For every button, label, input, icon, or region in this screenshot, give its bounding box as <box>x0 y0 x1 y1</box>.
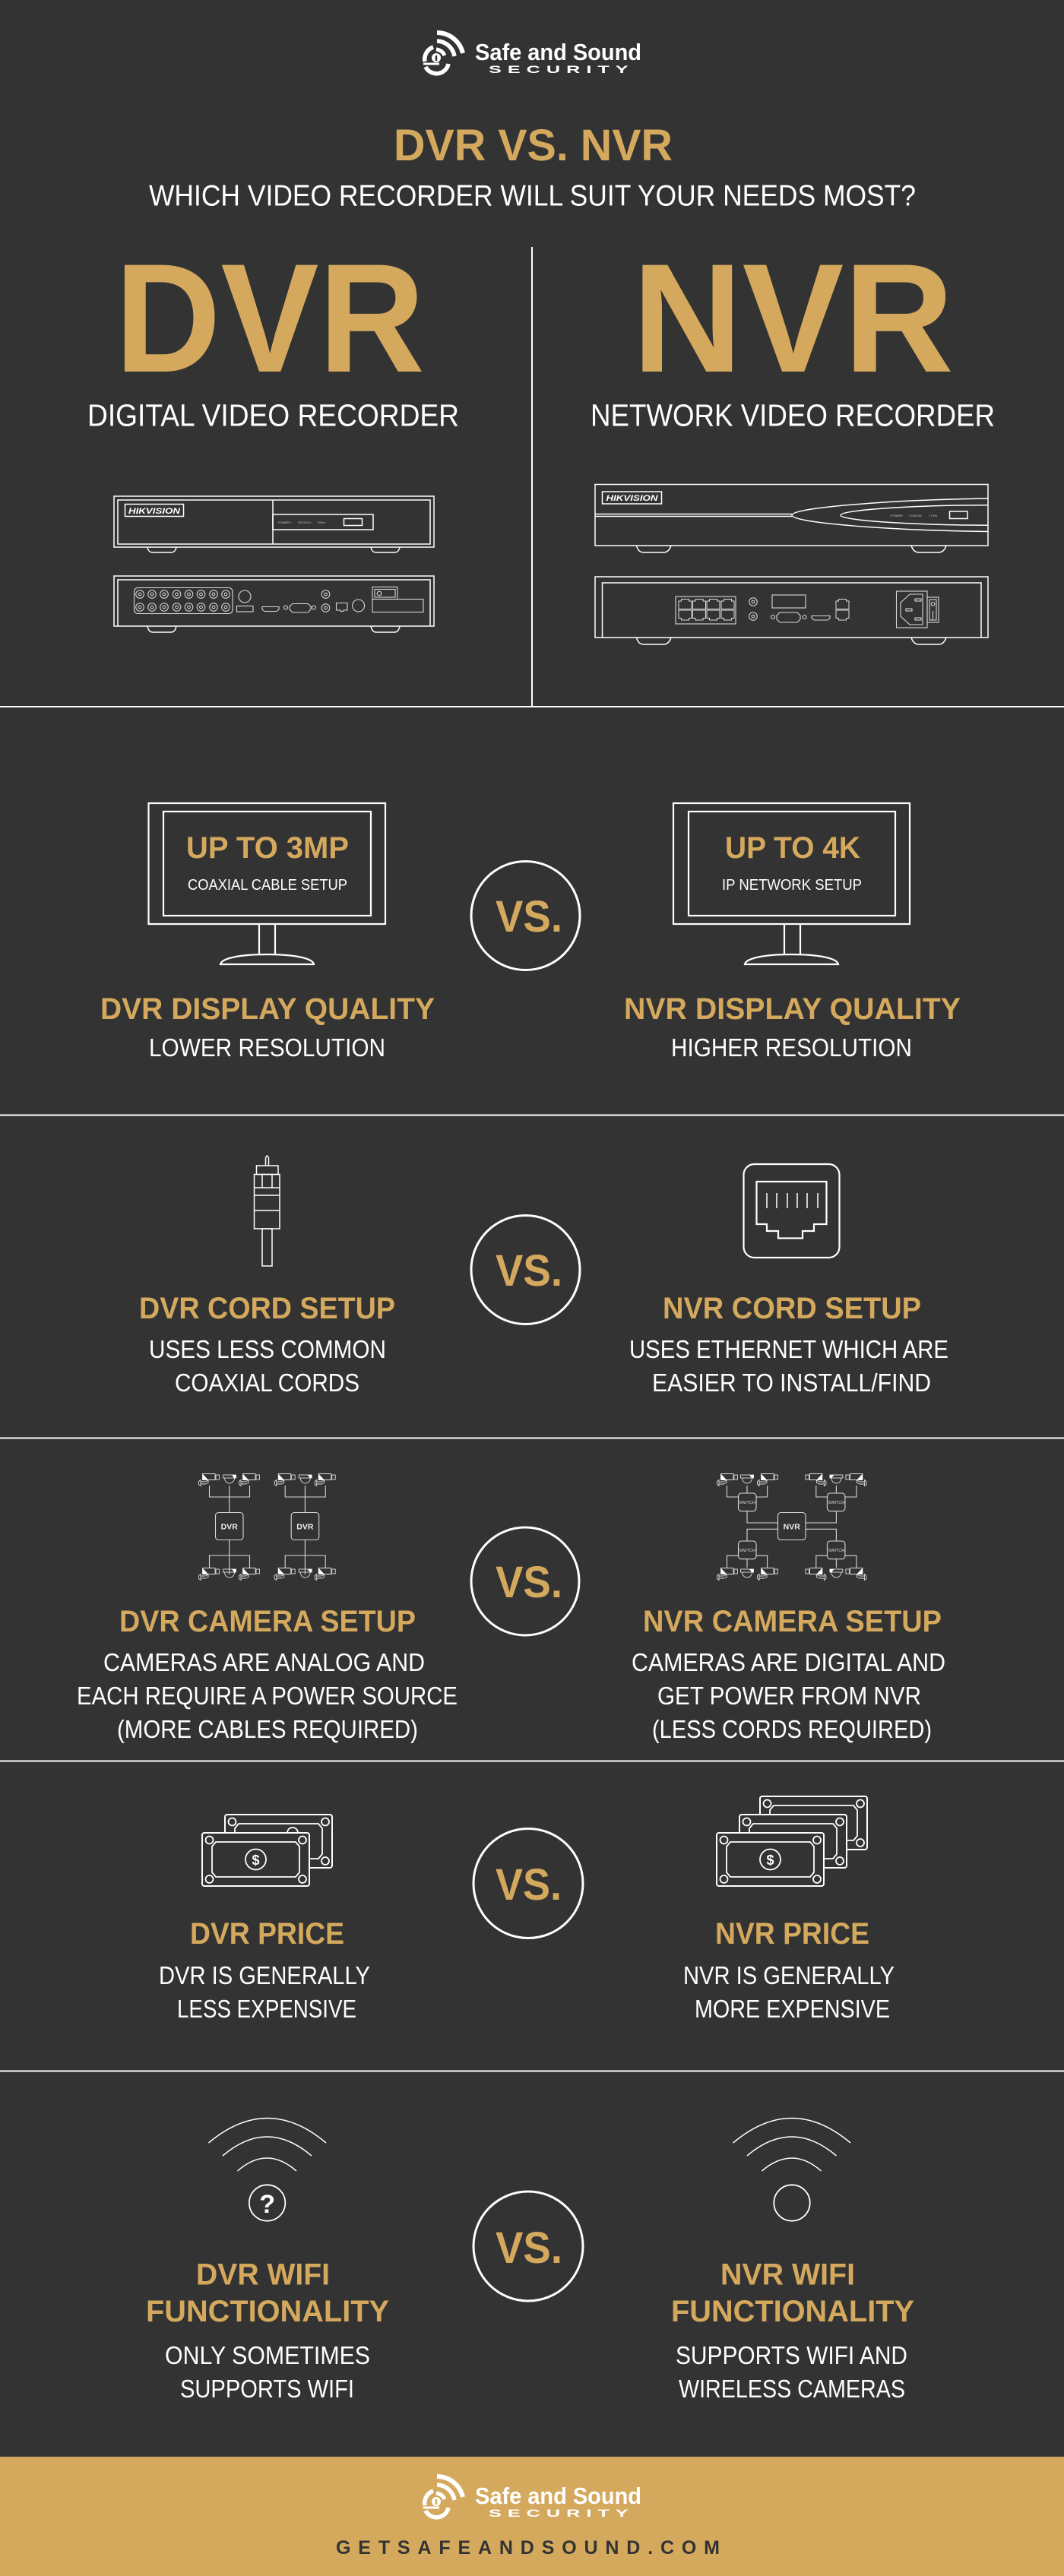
badge: VS 5 <box>473 2191 583 2301</box>
logo: Safe and Sound Security: Safe and Sound <box>475 39 641 65</box>
icon: NVR banknotes <box>717 1796 867 1886</box>
badge: VS 4: VS. <box>496 1860 562 1910</box>
NVR price text <box>683 1961 895 2023</box>
footer logo: SECURITY <box>489 2508 629 2519</box>
diagram: NVR camera wiring: SWITCH <box>739 1549 755 1553</box>
logo: Safe and Sound Security: SECURITY <box>489 64 629 75</box>
NVR cord heading: NVR CORD SETUP <box>663 1292 921 1325</box>
diagram: DVR camera wiring: DVR <box>296 1523 314 1532</box>
NVR wifi heading: NVR WIFI <box>720 2258 855 2292</box>
icon: wifi with question mark: ? <box>259 2190 275 2219</box>
icon: ethernet port <box>743 1164 839 1258</box>
heading: DVR: DVR <box>115 232 425 405</box>
diagram: DVR camera wiring: DVR <box>221 1523 238 1532</box>
icon: NVR front panel: ▪ STATUS <box>909 514 922 517</box>
diagram: NVR camera wiring: NVR <box>784 1523 800 1532</box>
NVR wifi heading: FUNCTIONALITY <box>671 2295 914 2328</box>
icon: DVR front panel: TV/N ▪ <box>317 521 326 524</box>
icon: NVR front panel: HIKVISION <box>606 494 659 503</box>
DVR price text <box>159 1961 370 2023</box>
diagram: NVR camera wiring: SWITCH <box>739 1501 755 1505</box>
icon: DVR banknotes: $ <box>252 1853 260 1868</box>
DVR wifi text: SUPPORTS WIFI <box>180 2375 354 2403</box>
heading: NVR full name: NETWORK VIDEO RECORDER <box>591 398 995 433</box>
NVR camera text: CAMERAS ARE DIGITAL AND <box>632 1648 945 1676</box>
NVR wifi text <box>676 2341 907 2403</box>
icon: DVR front panel: POWER ▪ <box>278 521 292 524</box>
icon: DVR front panel: STATUS ▪ <box>298 521 312 524</box>
DVR price text: LESS EXPENSIVE <box>177 1995 356 2023</box>
diagram: NVR camera wiring: SWITCH <box>828 1501 844 1505</box>
NVR wifi text: SUPPORTS WIFI AND <box>676 2341 907 2369</box>
heading: DVR full name: DIGITAL VIDEO RECORDER <box>87 398 459 433</box>
DVR wifi heading: FUNCTIONALITY <box>146 2295 389 2328</box>
NVR camera text: (LESS CORDS REQUIRED) <box>652 1715 932 1743</box>
icon: NVR rear panel <box>595 577 988 644</box>
DVR camera text <box>77 1648 458 1743</box>
icon: coaxial connector <box>254 1156 280 1266</box>
badge: VS 2 <box>471 1216 580 1324</box>
icon: wifi with empty circle <box>733 2119 850 2221</box>
NVR price text: MORE EXPENSIVE <box>695 1995 890 2023</box>
footer logo: Safe and Sound <box>475 2483 641 2509</box>
DVR wifi heading <box>146 2258 389 2328</box>
badge: VS 1: VS. <box>496 892 562 941</box>
DVR camera text: EACH REQUIRE A POWER SOURCE <box>77 1682 458 1710</box>
badge: VS 2: VS. <box>496 1246 562 1296</box>
icon: DVR monitor with resolution <box>149 803 385 964</box>
DVR display quality text: LOWER RESOLUTION <box>149 1033 385 1062</box>
NVR price heading: NVR PRICE <box>715 1917 869 1951</box>
title: DVR VS. NVR <box>394 121 673 170</box>
icon: NVR monitor with resolution: IP NETWORK SETUP <box>722 877 862 894</box>
NVR cord text: USES ETHERNET WHICH ARE <box>629 1335 948 1363</box>
diagram: DVR camera wiring <box>199 1474 335 1581</box>
DVR camera text: (MORE CABLES REQUIRED) <box>117 1715 418 1743</box>
DVR cord heading: DVR CORD SETUP <box>139 1292 395 1325</box>
icon: wifi with question mark <box>208 2119 326 2221</box>
badge: VS 1 <box>471 862 580 970</box>
DVR cord text: USES LESS COMMON <box>149 1335 386 1363</box>
icon: DVR front panel <box>114 496 434 552</box>
badge: VS 3 <box>471 1527 579 1635</box>
DVR wifi text <box>165 2341 370 2403</box>
section divider lines <box>0 707 1064 2071</box>
icon: DVR banknotes <box>202 1815 332 1886</box>
NVR camera text <box>632 1648 945 1743</box>
icon: DVR monitor with resolution: COAXIAL CABLE SETUP <box>188 877 347 894</box>
DVR cord text <box>149 1335 386 1397</box>
footer logo <box>423 2476 641 2519</box>
icon: NVR monitor with resolution: UP TO 4K <box>725 831 860 865</box>
icon: logo mark <box>423 33 463 74</box>
NVR cord text <box>629 1335 948 1397</box>
centre divider <box>531 247 533 707</box>
DVR wifi heading: DVR WIFI <box>196 2258 330 2292</box>
footer url: GETSAFEANDSOUND.COM <box>336 2537 720 2559</box>
NVR wifi text: WIRELESS CAMERAS <box>679 2375 905 2403</box>
NVR camera heading: NVR CAMERA SETUP <box>643 1605 942 1638</box>
icon: NVR monitor with resolution <box>673 803 910 964</box>
badge: VS 5: VS. <box>496 2223 562 2273</box>
diagram: NVR camera wiring <box>717 1474 866 1581</box>
DVR camera heading: DVR CAMERA SETUP <box>119 1605 416 1638</box>
DVR display quality heading: DVR DISPLAY QUALITY <box>100 992 435 1026</box>
NVR display quality heading: NVR DISPLAY QUALITY <box>624 992 961 1026</box>
heading: NVR: NVR <box>632 232 954 405</box>
NVR camera text: GET POWER FROM NVR <box>657 1682 921 1710</box>
badge: VS 4 <box>473 1828 583 1938</box>
NVR wifi heading <box>671 2258 914 2328</box>
icon: DVR monitor with resolution: UP TO 3MP <box>186 831 349 865</box>
diagram: NVR camera wiring: SWITCH <box>828 1549 844 1553</box>
icon: NVR front panel <box>595 485 988 552</box>
icon: DVR rear panel <box>114 576 434 632</box>
DVR camera text: CAMERAS ARE ANALOG AND <box>103 1648 425 1676</box>
icon: DVR front panel: HIKVISION <box>128 507 181 516</box>
badge: VS 3: VS. <box>496 1558 562 1607</box>
DVR cord text: COAXIAL CORDS <box>175 1369 359 1397</box>
icon: NVR front panel: ▪ TV/N <box>929 514 937 517</box>
DVR wifi text: ONLY SOMETIMES <box>165 2341 370 2369</box>
NVR display quality text: HIGHER RESOLUTION <box>671 1033 912 1062</box>
logo: Safe and Sound Security <box>423 33 641 75</box>
icon: NVR banknotes: $ <box>766 1853 774 1868</box>
icon: NVR front panel: ▪ POWER <box>890 514 903 517</box>
DVR price text: DVR IS GENERALLY <box>159 1961 370 1989</box>
NVR cord text: EASIER TO INSTALL/FIND <box>652 1369 931 1397</box>
footer band <box>0 2457 1064 2576</box>
subtitle: WHICH VIDEO RECORDER WILL SUIT YOUR NEEDS MOST? <box>149 179 916 213</box>
DVR price heading: DVR PRICE <box>190 1917 344 1951</box>
NVR price text: NVR IS GENERALLY <box>683 1961 895 1989</box>
